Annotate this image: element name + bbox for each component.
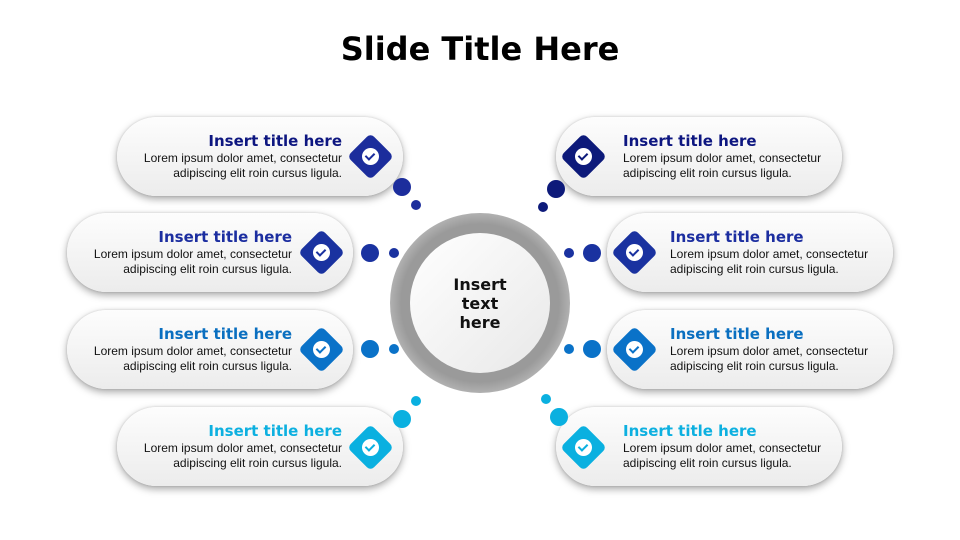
panel: left 3	[67, 310, 353, 389]
panel: left 1: Lorem ipsum dolor amet, consectetur adipiscing elit roin cursus ligula.	[144, 151, 342, 180]
center circle: Insert	[453, 274, 507, 294]
panel: right 4: Lorem ipsum dolor amet, consectetur adipiscing elit roin cursus ligula.	[623, 441, 821, 470]
panel: right 4: Insert title here	[623, 422, 757, 440]
panel: right 2: Lorem ipsum dolor amet, consectetur adipiscing elit roin cursus ligula.	[670, 247, 868, 276]
panel: left 2	[67, 213, 353, 292]
panel: right 2	[607, 213, 893, 292]
panel: left 4	[117, 407, 403, 486]
panel: right 4	[556, 407, 842, 486]
panel: right 1	[556, 117, 842, 196]
title: Slide Title Here	[341, 30, 619, 68]
panel: left 4: Lorem ipsum dolor amet, consectetur adipiscing elit roin cursus ligula.	[144, 441, 342, 470]
panel: right 3: Lorem ipsum dolor amet, consectetur adipiscing elit roin cursus ligula.	[670, 344, 868, 373]
panel: right 2: Insert title here	[670, 228, 804, 246]
panel: left 1	[117, 117, 403, 196]
panel: left 2: Lorem ipsum dolor amet, consectetur adipiscing elit roin cursus ligula.	[94, 247, 292, 276]
center circle: here	[460, 312, 500, 332]
panel: left 3: Insert title here	[158, 325, 292, 343]
panel: left 1: Insert title here	[208, 132, 342, 150]
panel: left 3: Lorem ipsum dolor amet, consectetur adipiscing elit roin cursus ligula.	[94, 344, 292, 373]
panel: left 4: Insert title here	[208, 422, 342, 440]
panel: right 3	[607, 310, 893, 389]
center circle: text	[462, 294, 498, 312]
center circle	[390, 213, 570, 393]
panel: left 2: Insert title here	[158, 228, 292, 246]
panel: right 1: Lorem ipsum dolor amet, consectetur adipiscing elit roin cursus ligula.	[623, 151, 821, 180]
panel: right 1: Insert title here	[623, 132, 757, 150]
panel: right 3: Insert title here	[670, 325, 804, 343]
